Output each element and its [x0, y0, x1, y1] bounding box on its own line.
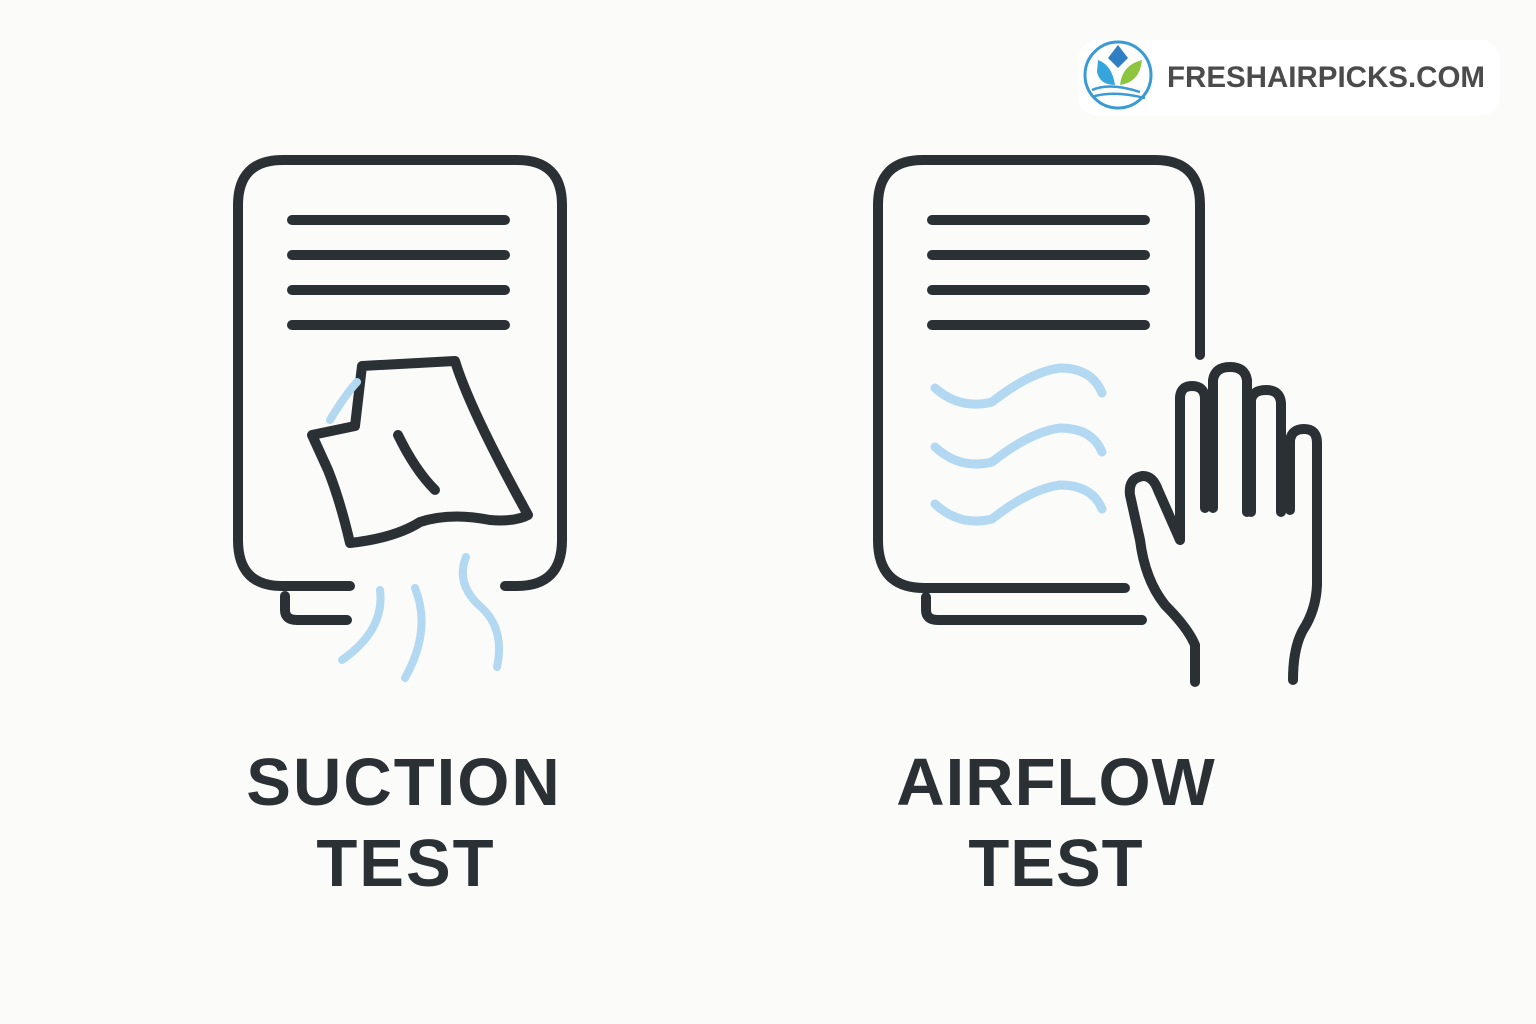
icon: tissue: [312, 361, 528, 543]
air flow waves: airflow: [935, 368, 1102, 521]
icon: airflow test device: [878, 160, 1317, 682]
heading: suction test: TEST: [316, 826, 496, 901]
heading: airflow test: [896, 745, 1216, 901]
heading: suction test: SUCTION: [246, 745, 562, 820]
heading: suction test: [246, 745, 562, 901]
heading: airflow test: TEST: [968, 826, 1144, 901]
icon: suction test device: [238, 160, 562, 620]
logo: [1078, 40, 1500, 116]
heading: airflow test: AIRFLOW: [896, 745, 1216, 820]
logo: FRESHAIRPICKS.COM: [1167, 61, 1485, 94]
icon: hand: [1130, 367, 1317, 682]
air flow lines: suction: [330, 382, 499, 678]
